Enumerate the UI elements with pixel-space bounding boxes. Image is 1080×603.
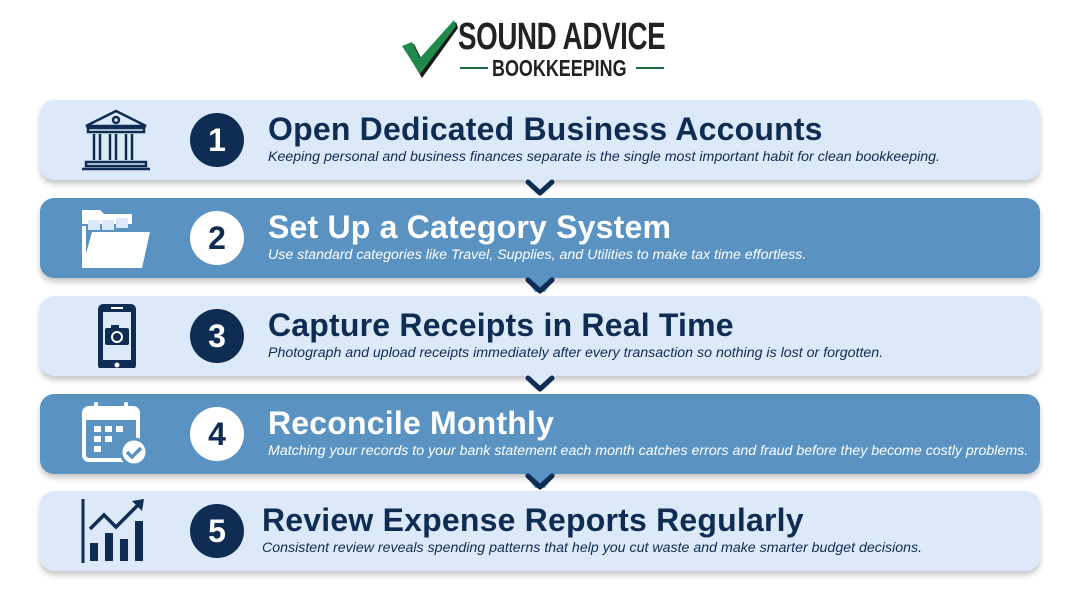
text: Consistent review reveals spending patterns that help you cut waste and make smarter budget decisions. (262, 540, 922, 556)
panel 4 (40, 394, 1040, 474)
text: Photograph and upload receipts immediately after every transaction so nothing is lost or forgotten. (268, 345, 883, 361)
panel 2 (40, 198, 1040, 278)
panel 5 (40, 491, 1040, 571)
number 2 (190, 211, 244, 265)
number 3: 3 (208, 318, 226, 354)
number 3 (190, 309, 244, 363)
number 5: 5 (208, 513, 226, 549)
heading: Set Up a Category System (268, 209, 671, 245)
text: Matching your records to your bank statement each month catches errors and fraud before they become costly problems. (268, 443, 1028, 459)
icon: calendar check (82, 402, 146, 464)
logo text: SOUND ADVICE (458, 16, 665, 58)
heading: Capture Receipts in Real Time (268, 307, 734, 343)
number 1: 1 (208, 122, 226, 158)
text: Use standard categories like Travel, Supplies, and Utilities to make tax time effortless. (268, 247, 806, 263)
icon: phone camera (98, 304, 136, 368)
icon: bank (82, 110, 150, 170)
heading: Open Dedicated Business Accounts (268, 111, 823, 147)
logo: BOOKKEEPING (492, 55, 627, 81)
icon: folder (82, 210, 150, 268)
number 1 (190, 113, 244, 167)
number 2: 2 (208, 220, 226, 256)
arrow: chevron (526, 278, 554, 294)
heading: Review Expense Reports Regularly (262, 502, 804, 538)
icon: green checkmark (402, 20, 458, 78)
number 4 (190, 407, 244, 461)
panel 3 (40, 296, 1040, 376)
heading: Reconcile Monthly (268, 405, 554, 441)
icon: growth chart (82, 499, 144, 563)
text: Keeping personal and business finances separate is the single most important habit for clean bookkeeping. (268, 149, 940, 165)
logo (402, 16, 665, 81)
arrow: chevron (526, 376, 554, 392)
number 5 (190, 504, 244, 558)
arrow: chevron (526, 474, 554, 490)
number 4: 4 (208, 416, 226, 452)
panel 1 (40, 100, 1040, 180)
arrow: chevron (526, 180, 554, 196)
